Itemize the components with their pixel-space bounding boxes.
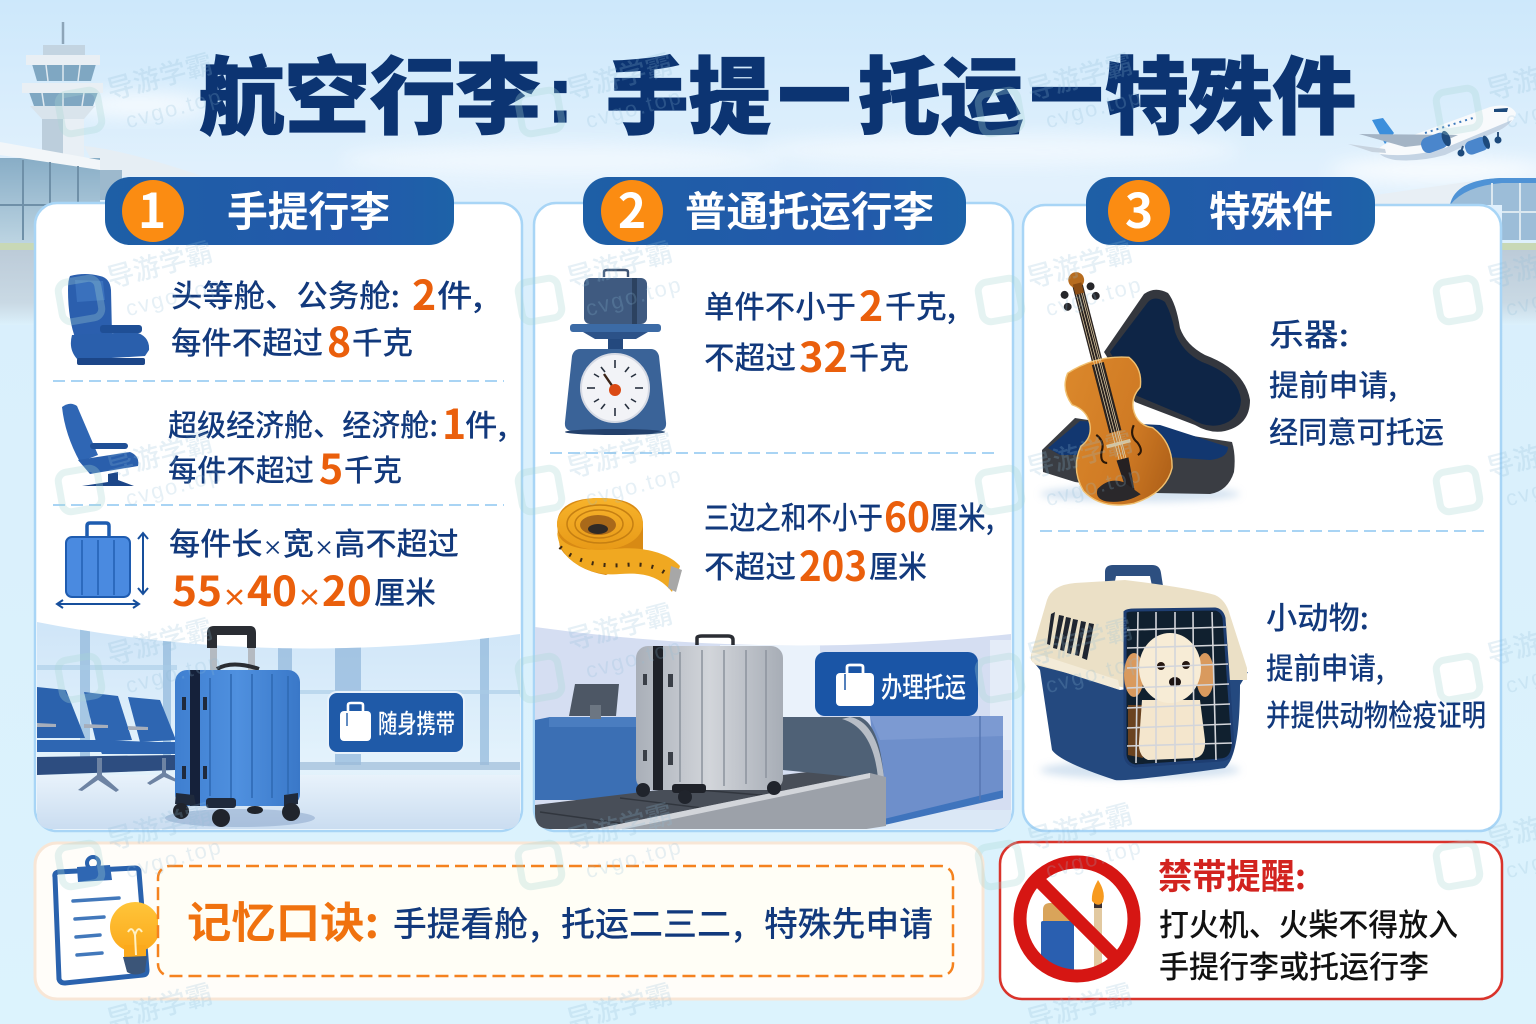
text: minimum and maximum weight: 千克, <box>885 282 956 327</box>
text: first and business class: 每件不超过 <box>171 318 323 363</box>
text: first and business class: 千克 <box>352 318 413 363</box>
watermarks: cvgo.top <box>1043 833 1145 883</box>
watermarks: cvgo.top <box>1043 648 1145 698</box>
text: premium economy and economy: 1 <box>442 391 466 451</box>
title: 手提 <box>606 31 771 152</box>
watermarks: 导游学霸 <box>562 42 676 108</box>
watermarks: 导游学霸 <box>102 420 216 486</box>
watermarks: cvgo.top <box>583 833 685 883</box>
panel: special items <box>1023 205 1501 831</box>
watermarks: cvgo.top <box>1043 83 1145 133</box>
watermarks: 导游学霸 <box>102 607 216 673</box>
watermarks: 导游学霸 <box>562 230 676 296</box>
panel: checked baggage <box>534 203 1013 832</box>
header: carry-on <box>105 172 454 245</box>
panel: memory mnemonic <box>35 843 983 999</box>
dividers <box>53 381 1484 531</box>
text: musical instruments <box>1269 310 1444 452</box>
text: first and business class: 2 <box>412 262 436 322</box>
sign: check in <box>815 652 978 716</box>
panel: prohibited items warning: 禁带提醒: <box>1158 849 1306 900</box>
watermarks: 导游学霸 <box>1022 230 1136 296</box>
illustration: terminal building left <box>0 142 202 243</box>
sign: carry with you <box>328 692 464 753</box>
watermarks: 导游学霸 <box>562 592 676 658</box>
icon: first class seat <box>68 274 149 365</box>
text: size limits: 不超过 <box>704 542 796 587</box>
text: minimum and maximum weight: 千克 <box>849 333 909 378</box>
icon: economy seat <box>62 404 138 486</box>
text: minimum and maximum weight: 不超过 <box>704 333 796 378</box>
text: premium economy and economy <box>168 391 507 496</box>
title: 一 <box>1030 31 1103 152</box>
watermarks: 导游学霸 <box>102 230 216 296</box>
text: premium economy and economy: 每件不超过 <box>168 446 314 490</box>
header: checked: 普通托运行李 <box>685 178 934 238</box>
text: small animals <box>1266 593 1486 735</box>
watermarks: cvgo.top <box>123 271 225 321</box>
watermarks: cvgo.top <box>123 83 225 133</box>
text: size limits: 三边之和不小于 <box>704 493 883 538</box>
text: first and business class <box>171 262 483 369</box>
illustration: control tower <box>22 22 103 160</box>
right counter <box>870 716 1003 822</box>
header: checked <box>583 172 966 245</box>
sign: check in: 办理托运 <box>881 666 966 706</box>
text: small animals: 并提供动物检疫证明 <box>1266 691 1486 735</box>
title: : <box>547 50 574 139</box>
callout: mnemonic box: 手提看舱 <box>393 897 528 946</box>
watermarks: cvgo.top <box>583 83 685 133</box>
text: small animals: 提前申请, <box>1266 644 1384 688</box>
text: premium economy and economy: 千克 <box>344 446 402 490</box>
text: premium economy and economy: 超级经济舱、经济舱: <box>168 401 438 445</box>
icon: baggage scale <box>565 270 666 435</box>
scene: check-in counter <box>535 625 1013 832</box>
icon: violin and open case <box>1028 260 1250 515</box>
callout: mnemonic box: , <box>733 897 743 946</box>
header: carry-on: 手提行李 <box>227 178 390 238</box>
text: premium economy and economy: 5 <box>319 436 343 496</box>
title: 航空行李 <box>199 31 541 152</box>
watermarks: cvgo.top <box>123 461 225 511</box>
title: 一 <box>778 31 851 152</box>
sign: carry with you: 随身携带 <box>378 704 455 741</box>
text: minimum and maximum weight: 单件不小于 <box>704 282 856 327</box>
text: size limits: 203 <box>799 533 867 593</box>
watermarks: cvgo.top <box>123 833 225 883</box>
text: size limits: 60 <box>884 484 930 544</box>
illustration: airplane <box>1348 105 1516 160</box>
text: musical instruments: 经同意可托运 <box>1269 408 1444 452</box>
header: special: 特殊件 <box>1209 178 1333 238</box>
text: first and business class: 8 <box>327 309 351 369</box>
text: first and business class: 头等舱、公务舱: <box>171 271 400 316</box>
seats row <box>37 687 176 792</box>
header: checked: 2 <box>618 172 646 242</box>
header: special: 3 <box>1125 172 1153 242</box>
header: carry-on: 1 <box>138 172 166 242</box>
text: musical instruments: 乐器: <box>1269 310 1349 355</box>
text: size limits <box>704 484 994 593</box>
text: size limits: 厘米, <box>930 493 994 538</box>
watermarks: cvgo.top <box>583 633 685 683</box>
icon: no lighters or matches <box>1020 862 1134 981</box>
watermarks: 导游学霸 <box>102 42 216 108</box>
illustration: terminal building right <box>1375 178 1536 240</box>
watermarks: 导游学霸 <box>102 792 216 858</box>
text: minimum and maximum weight <box>704 273 956 384</box>
icon: measuring tape <box>557 498 682 592</box>
icon: pet carrier with puppy <box>1031 565 1248 780</box>
text: minimum and maximum weight: 2 <box>859 273 883 333</box>
watermarks: cvgo.top <box>1043 461 1145 511</box>
title <box>199 31 1356 152</box>
conveyor belt <box>535 772 852 829</box>
panel: prohibited items warning: 打火机、火柴不得放入 <box>1159 900 1458 945</box>
watermarks: 导游学霸 <box>1022 607 1136 673</box>
panel: carry-on baggage <box>35 203 522 831</box>
left counter <box>535 717 640 800</box>
callout: mnemonic box: 特殊先申请 <box>764 897 933 946</box>
watermarks: 导游学霸 <box>1022 420 1136 486</box>
panel: prohibited items warning: 手提行李或托运行李 <box>1159 942 1429 987</box>
text: carry-on size limit: 厘米 <box>374 568 436 613</box>
watermarks: 导游学霸 <box>562 792 676 858</box>
carry-on suitcase <box>165 626 315 827</box>
callout: mnemonic box: 记忆口诀: <box>187 889 379 951</box>
icon: clipboard with light bulb <box>55 857 160 983</box>
text: musical instruments: 提前申请, <box>1269 361 1397 405</box>
text: size limits: 厘米 <box>869 542 927 587</box>
callout: mnemonic box: , <box>530 897 540 946</box>
panel: prohibited items warning <box>1000 842 1502 999</box>
watermarks: 导游学霸 <box>562 420 676 486</box>
watermarks: 导游学霸 <box>1022 792 1136 858</box>
scene: airport waiting hall <box>37 620 521 831</box>
watermarks: cvgo.top <box>583 461 685 511</box>
text: first and business class: 件, <box>437 271 483 316</box>
puppy <box>1124 633 1214 760</box>
title: 托运 <box>858 31 1023 152</box>
icon: suitcase with dimensions <box>57 523 148 608</box>
silver suitcase <box>636 636 783 804</box>
title: 特殊件 <box>1105 31 1356 152</box>
text: carry-on size limit: 每件长×宽×高不超过 <box>169 519 459 564</box>
callout: mnemonic box <box>158 866 953 976</box>
text: carry-on size limit <box>169 519 459 618</box>
text: small animals: 小动物: <box>1266 593 1369 638</box>
text: minimum and maximum weight: 32 <box>799 324 848 384</box>
text: carry-on size limit: 55×40×20 <box>172 558 372 618</box>
header: special <box>1086 172 1375 245</box>
callout: mnemonic box: 托运二三二 <box>561 897 731 946</box>
watermarks: 导游学霸 <box>1022 42 1136 108</box>
watermarks: cvgo.top <box>1043 271 1145 321</box>
watermarks: cvgo.top <box>583 271 685 321</box>
watermarks: cvgo.top <box>123 648 225 698</box>
text: premium economy and economy: 件, <box>465 401 507 445</box>
